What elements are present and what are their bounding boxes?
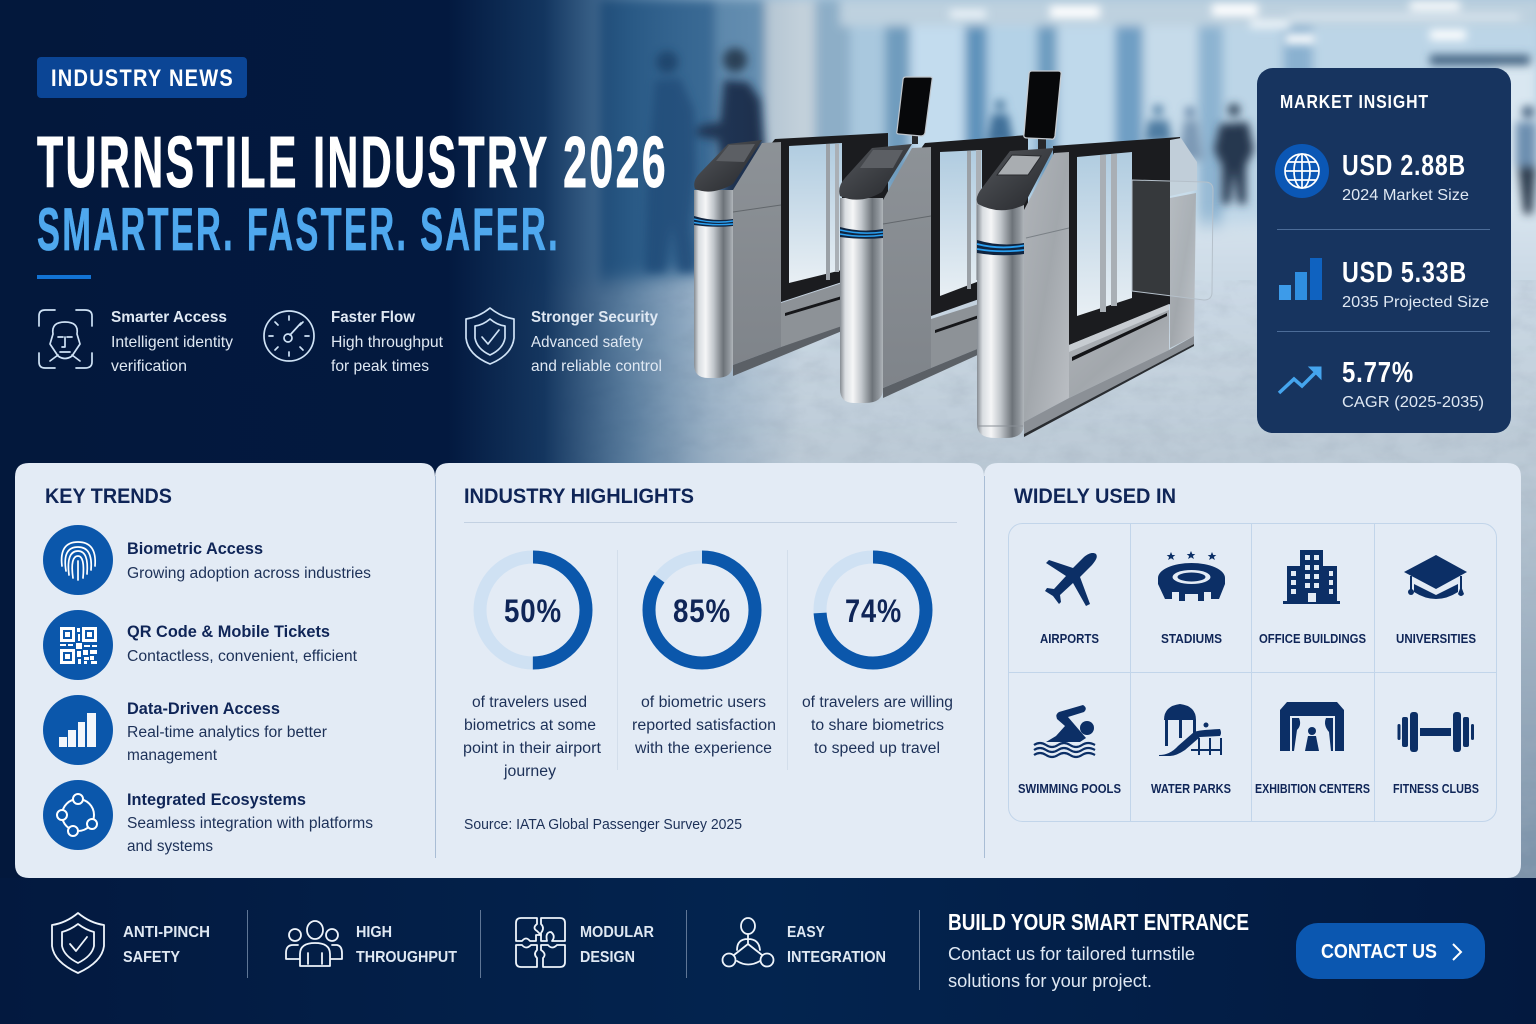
caption: 50 percent [463,694,602,780]
footer feature: modular design: DESIGN [580,949,635,966]
icon: safety shield [52,913,104,973]
stat: projected size 2035: USD 5.33B [1342,257,1467,289]
text: smarter access: Intelligent identity [111,334,233,351]
text: smarter access: Smarter Access [111,309,227,326]
trend: data-driven access: management [127,747,218,764]
turnstile gate middle [839,135,1028,403]
cell: office buildings: OFFICE BUILDINGS [1259,631,1366,646]
heading: widely used in: WIDELY USED IN [1014,485,1176,508]
turnstile gate left [694,133,888,378]
trend: data-driven access [43,695,327,765]
caption: 50 percent: point in their airport [463,740,602,757]
subtitle: SMARTER. FASTER. SAFER. [37,196,560,263]
donut: 85 percent [649,557,755,663]
icon: people [286,921,342,966]
badge: industry news: INDUSTRY NEWS [51,65,234,92]
caption: 74 percent: to speed up travel [814,740,940,757]
icon: puzzle [516,918,565,967]
text: stronger security: and reliable control [531,358,662,375]
icon: gauge [264,311,314,361]
caption: 50 percent: biometrics at some [464,717,596,734]
trend: integrated ecosystems: Seamless integration with platforms [127,815,373,832]
footer feature: anti-pinch safety: ANTI-PINCH [123,924,210,941]
panel: widely used in [984,463,1521,878]
call to action text: Contact us for tailored turnstile [948,944,1195,964]
caption: 50 percent: of travelers used [472,694,587,711]
footer feature: high throughput [286,921,457,966]
footer feature: high throughput: THROUGHPUT [356,949,457,966]
cell: stadiums [1158,551,1225,646]
footer feature: easy integration [722,918,886,966]
source note: Source: IATA Global Passenger Survey 2025 [464,817,742,833]
trend: data-driven access: Data-Driven Access [127,699,280,718]
turnstile gate front [977,137,1213,438]
stat: projected size 2035: 2035 Projected Size [1342,294,1489,311]
panel: key trends [15,463,435,878]
footer feature: easy integration: EASY [787,924,825,941]
trend: qr code and mobile tickets: Contactless, convenient, efficient [127,648,358,665]
cell: swimming pools: SWIMMING POOLS [1018,781,1121,796]
cell: fitness clubs: FITNESS CLUBS [1393,781,1479,796]
footer band [0,878,1536,1024]
caption: 74 percent [802,694,953,757]
cell: universities [1396,555,1476,646]
stat: cagr: CAGR (2025-2035) [1342,394,1484,411]
text: stronger security: Stronger Security [531,309,658,326]
footer feature: easy integration: INTEGRATION [787,949,886,966]
text: faster flow [331,309,444,375]
title: TURNSTILE INDUSTRY 2026 [37,123,668,203]
trend: integrated ecosystems: Integrated Ecosystems [127,790,306,809]
stat: cagr: 5.77% [1342,357,1414,389]
badge: industry news [37,57,247,98]
caption: 74 percent: of travelers are willing [802,694,953,711]
icon: face scan [39,310,92,368]
caption: 85 percent: with the experience [634,740,772,757]
call to action text [948,909,1249,991]
trend: qr code and mobile tickets: QR Code & Mobile Tickets [127,622,330,641]
call to action text: BUILD YOUR SMART ENTRANCE [948,909,1249,935]
stat: market size 2024: USD 2.88B [1342,150,1466,182]
cell: airports: AIRPORTS [1040,631,1099,646]
turnstile illustration [694,71,1213,438]
feature: smarter access [39,309,233,375]
footer feature: anti-pinch safety [52,913,210,973]
cell: water parks: WATER PARKS [1151,781,1231,796]
donut: 50 percent: 50% [504,593,562,629]
feature: faster flow [264,309,444,375]
footer feature: modular design: MODULAR [580,924,654,941]
cell: swimming pools [1018,705,1121,796]
heading: market insight: MARKET INSIGHT [1280,92,1429,112]
footer feature: modular design [516,918,654,967]
trend: data-driven access: Real-time analytics for better [127,724,327,741]
stat: projected size 2035 [1342,257,1489,311]
trend: integrated ecosystems: and systems [127,838,213,855]
donut: 74 percent [820,557,926,663]
button: contact us: CONTACT US [1321,941,1437,963]
stat: market size 2024 [1342,150,1469,204]
icon: shield [466,308,514,364]
panel: industry highlights [435,463,984,878]
trend: biometric access: Growing adoption across industries [127,565,371,582]
text: smarter access [111,309,233,375]
caption: 74 percent: to share biometrics [811,717,944,734]
icon: globe [1275,144,1329,198]
caption: 85 percent: reported satisfaction [632,717,776,734]
stat: cagr [1342,357,1484,411]
donut: 50 percent [480,557,586,663]
cell: universities: UNIVERSITIES [1396,631,1476,646]
heading: key trends: KEY TRENDS [45,485,172,508]
heading: industry highlights: INDUSTRY HIGHLIGHTS [464,485,694,508]
text: faster flow: Faster Flow [331,309,416,326]
cell: airports [1040,553,1099,646]
donut: 85 percent: 85% [673,593,731,629]
trend: qr code and mobile tickets [43,610,358,680]
caption: 85 percent: of biometric users [641,694,766,711]
cell: exhibition centers [1255,702,1370,796]
footer feature: high throughput: HIGH [356,924,392,941]
donut: 74 percent: 74% [845,593,902,629]
icon: bars [1279,258,1322,300]
call to action text: solutions for your project. [948,971,1152,991]
text: stronger security: Advanced safety [531,334,643,351]
cell: stadiums: STADIUMS [1161,631,1222,646]
icon: network [722,918,774,966]
tablet right [1024,71,1061,150]
feature: stronger security [466,308,662,375]
text: smarter access: verification [111,358,187,375]
tablet left [897,77,932,144]
cell: office buildings [1259,550,1366,646]
cell: fitness clubs [1393,712,1479,796]
panel: market insight [1257,68,1511,433]
text: faster flow: for peak times [331,358,429,375]
footer feature: anti-pinch safety: SAFETY [123,949,180,966]
icon: trend arrow [1279,367,1321,393]
trend: biometric access: Biometric Access [127,539,263,558]
cell: water parks [1151,704,1231,796]
trend: biometric access [43,525,371,595]
text: faster flow: High throughput [331,334,444,351]
stat: market size 2024: 2024 Market Size [1342,187,1469,204]
caption: 50 percent: journey [503,763,556,780]
cell: exhibition centers: EXHIBITION CENTERS [1255,781,1370,796]
button: contact us [1296,923,1485,979]
caption: 85 percent [632,694,776,757]
text: stronger security [531,309,662,375]
trend: integrated ecosystems [43,780,373,855]
